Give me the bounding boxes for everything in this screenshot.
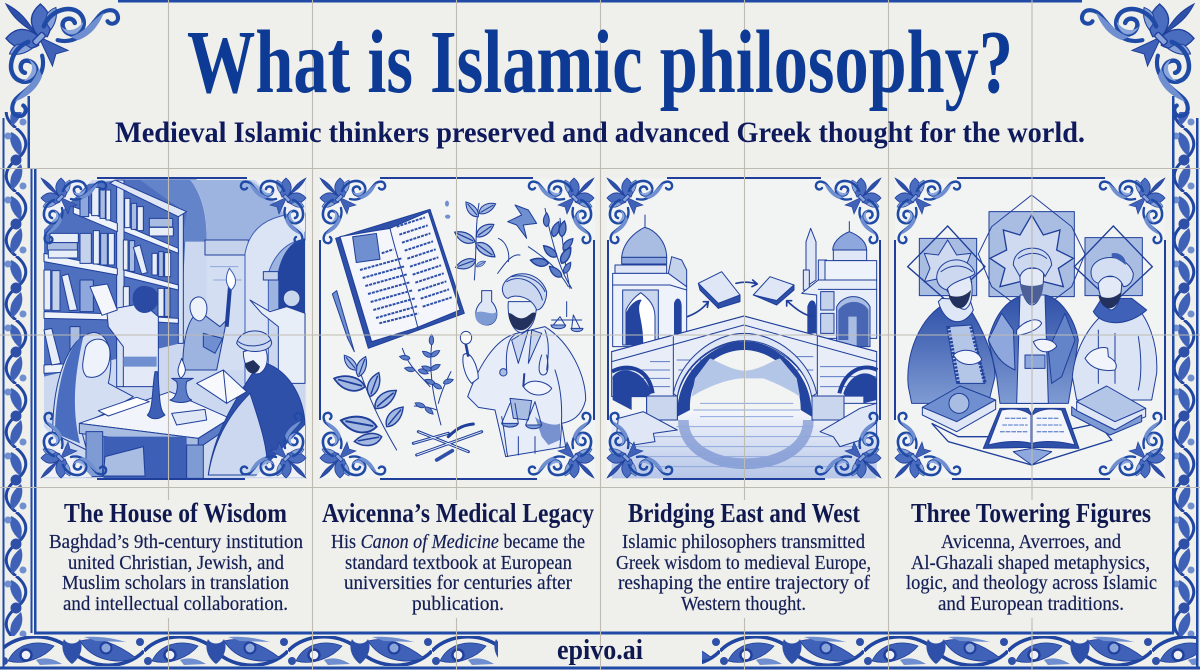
- right scholar: [1072, 302, 1157, 400]
- caption: Bridging East and West: Bridging East and West: [628, 498, 860, 528]
- caption: Medical Legacy: His Canon of Medicine became the: [331, 531, 585, 553]
- caption: Bridging East and West: Islamic philosophers transmitted: [622, 531, 865, 553]
- corner ornament: top left: [6, 4, 118, 116]
- head and turban: [508, 302, 537, 333]
- left scholar: [908, 302, 995, 403]
- pen: [332, 291, 354, 352]
- left building: [622, 227, 667, 257]
- caption: Medical Legacy: standard textbook at European: [345, 552, 572, 574]
- caption: Three Towering Figures: and European traditions.: [938, 593, 1124, 615]
- caption: House of Wisdom: Baghdad’s 9th-century institution: [49, 531, 303, 553]
- side arches: [613, 370, 652, 410]
- caption: Bridging East and West: [616, 498, 871, 615]
- caption: House of Wisdom: The House of Wisdom: [64, 498, 287, 528]
- cinnamon sticks: [413, 424, 482, 455]
- panel: Bridge illustration: [607, 178, 880, 478]
- subtitle: Medieval Islamic thinkers preserved and advanced Greek thought for the world.: [115, 116, 1085, 149]
- caption: Bridging East and West: Greek wisdom to medieval Europe,: [616, 552, 871, 574]
- arrows between books: [687, 280, 813, 317]
- footer brand: epivo.ai: [557, 635, 643, 666]
- caption: Medical Legacy: Avicenna’s Medical Legacy: [322, 498, 594, 528]
- seated scholar: [208, 362, 305, 475]
- panel: Three figures illustration: [895, 178, 1165, 478]
- flask: [476, 291, 497, 325]
- caption: Bridging East and West: reshaping the entire trajectory of: [618, 572, 870, 594]
- river: [612, 410, 877, 478]
- lavender bunch: [528, 208, 572, 288]
- caption: House of Wisdom: Muslim scholars in translation: [62, 572, 289, 594]
- caption: Three Towering Figures: [906, 498, 1157, 615]
- caption: Three Towering Figures: logic, and theology across Islamic: [906, 572, 1157, 594]
- caption: Medical Legacy: [322, 498, 594, 615]
- center scholar: [988, 295, 1078, 403]
- right building: [833, 232, 867, 250]
- panel: House of Wisdom illustration: [44, 179, 306, 478]
- scale: [552, 302, 582, 328]
- torch bearer: [183, 312, 227, 370]
- open book: [983, 408, 1079, 448]
- doorway figure: [250, 300, 305, 383]
- caption: House of Wisdom: [49, 498, 303, 615]
- physician: [468, 327, 586, 457]
- panel: Avicenna illustration: [320, 178, 595, 478]
- book left: [698, 272, 740, 308]
- panel frames and corner scrollwork: [41, 178, 1165, 479]
- table: [79, 392, 230, 438]
- riverbanks: [617, 412, 677, 445]
- corner ornament: top right: [1082, 4, 1194, 116]
- standing scholar: [107, 303, 158, 387]
- geometric star backgrounds: [989, 212, 1074, 297]
- caption: Three Towering Figures: Avicenna, Averroes, and: [941, 531, 1121, 553]
- desk objects: [98, 397, 149, 416]
- book right: [753, 277, 794, 301]
- caption: Three Towering Figures: Al-Ghazali shaped metaphysics,: [911, 552, 1150, 574]
- leafy branch: [358, 367, 397, 450]
- caption: Bridging East and West: Western thought.: [681, 593, 806, 615]
- herb top: [474, 203, 479, 280]
- open book: [336, 209, 464, 348]
- caption: House of Wisdom: united Christian, Jewish, and: [68, 552, 284, 574]
- lower book stacks: [932, 423, 1112, 465]
- caption: House of Wisdom: and intellectual collaboration.: [63, 593, 288, 615]
- seated woman: [53, 332, 133, 450]
- caption: Medical Legacy: publication.: [412, 593, 504, 615]
- bridge: [612, 316, 877, 420]
- sprig and flower: [498, 238, 520, 273]
- fern sprig: [402, 343, 451, 425]
- caption: Three Towering Figures: Three Towering Figures: [911, 498, 1151, 528]
- caption: Medical Legacy: universities for centuries after: [344, 572, 572, 594]
- hands and tools: [463, 354, 478, 383]
- far hills: [692, 358, 744, 397]
